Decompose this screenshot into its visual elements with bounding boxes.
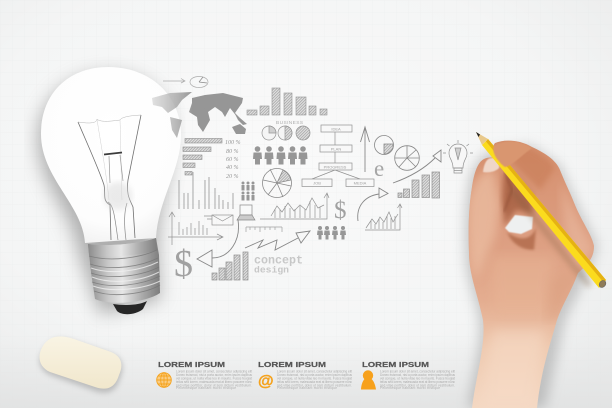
hand shading	[469, 140, 592, 376]
body text: sed vitae porttitor, dolor ut sem dictum vestibulum.	[380, 384, 455, 388]
icon: at sign: @	[258, 373, 274, 390]
concept design caption: design	[254, 264, 289, 276]
body text	[176, 370, 252, 390]
glass stem	[104, 182, 132, 210]
letter e: e	[374, 156, 384, 181]
info block: globe	[157, 362, 252, 390]
body text: Donec euismod, nisl a porta auctor, enim ipsum dapibus	[277, 373, 352, 377]
axis chart	[168, 212, 223, 245]
body text: Donec euismod, nisl a porta auctor, enim ipsum dapibus	[176, 373, 252, 377]
glass envelope	[41, 67, 181, 243]
gap between fingers	[505, 215, 533, 234]
body text: sed vitae porttitor, dolor ut sem dictum vestibulum.	[277, 384, 352, 388]
dollar sign left: $	[174, 243, 193, 285]
pencil	[476, 132, 607, 289]
percentages: 100 %	[225, 140, 240, 146]
pencil end	[598, 279, 607, 289]
body text: tellus sed lorem, malesuada erat at libero posuere nunc	[380, 380, 455, 384]
pencil point	[476, 132, 488, 145]
large pie chart	[262, 168, 292, 198]
body text: vel congue, ut nulla vitae leo in mauris. Fusce feugiat	[277, 376, 352, 380]
heading: LOREM IPSUM	[158, 362, 225, 369]
percentages: 60 %	[226, 157, 238, 163]
zigzag arrow	[245, 231, 310, 250]
body text: tellus sed lorem, malesuada erat at libero posuere nunc	[277, 380, 352, 384]
heading: LOREM IPSUM	[258, 362, 326, 369]
icon: person	[361, 370, 376, 390]
up arrow	[360, 127, 370, 172]
flowchart	[302, 125, 374, 186]
filament assembly	[78, 115, 141, 240]
light bulb	[38, 67, 181, 314]
body text: sed vitae porttitor, dolor ut sem dictum vestibulum.	[176, 384, 252, 388]
body text: Donec euismod, nisl a porta auctor, enim ipsum dapibus	[380, 373, 455, 377]
body text: Lorem ipsum dolor sit amet, consectetur adipiscing elit	[176, 370, 252, 374]
body text: Pellentesque habitant morbi tristique	[176, 386, 236, 390]
pencil shadow	[512, 190, 590, 286]
body text	[380, 370, 455, 390]
coin stacks	[212, 252, 248, 280]
people group bottom	[317, 226, 346, 240]
body text: Pellentesque habitant morbi tristique	[277, 386, 337, 390]
horizontal progress bars	[183, 138, 222, 175]
screw base	[88, 238, 160, 314]
pie with hatched slice	[374, 136, 394, 154]
percentages: 20 %	[226, 174, 238, 180]
info block: person	[361, 362, 455, 390]
body text	[277, 370, 352, 390]
body text: vel congue, ut nulla vitae leo in mauris. Fusce feugiat	[380, 376, 455, 380]
ruler	[246, 227, 282, 232]
light bulb idea icon	[443, 140, 473, 173]
pencil body	[482, 139, 606, 288]
laptop	[237, 205, 255, 220]
small area chart	[365, 204, 402, 230]
index fingertip over pencil	[493, 141, 532, 167]
rising bars	[398, 172, 440, 198]
body text: tellus sed lorem, malesuada erat at libero posuere nunc	[176, 380, 252, 384]
segmented wheel	[395, 146, 419, 170]
hand holding pencil	[465, 141, 598, 408]
flowchart: MEDIA	[354, 180, 367, 186]
info block: at sign	[258, 362, 352, 390]
hand shadow	[465, 145, 598, 408]
envelope	[204, 215, 233, 225]
thumbnail	[483, 158, 499, 172]
three round charts	[262, 126, 310, 140]
body text: Lorem ipsum dolor sit amet, consectetur adipiscing elit	[380, 370, 455, 374]
concept design caption	[254, 254, 303, 276]
dollar sign right: $	[334, 197, 346, 224]
heading: LOREM IPSUM	[362, 362, 429, 369]
percentages: 80 %	[226, 149, 238, 155]
sketch drawings	[152, 76, 473, 285]
bulb shadow	[38, 74, 172, 314]
body text: Lorem ipsum dolor sit amet, consectetur adipiscing elit	[277, 370, 352, 374]
percentages	[225, 140, 240, 180]
eraser	[40, 336, 122, 393]
area chart	[260, 193, 329, 219]
row of people	[253, 146, 308, 164]
flowchart: PROGRESS	[324, 164, 347, 170]
business heading: BUSINESS	[276, 120, 303, 126]
curved arrow right	[358, 188, 388, 221]
world map	[152, 92, 247, 138]
curved arrow to dollar	[197, 220, 238, 267]
body text: vel congue, ut nulla vitae leo in mauris. Fusce feugiat	[176, 376, 252, 380]
growth arrow	[393, 150, 441, 183]
small arrow and pie	[163, 76, 208, 88]
flowchart: PLAN	[331, 146, 341, 152]
small people grid	[242, 182, 254, 200]
hatched bar chart	[247, 88, 327, 115]
flowchart: IDEA	[331, 126, 341, 132]
percentages: 40 %	[226, 164, 238, 171]
flowchart: JOB	[313, 180, 321, 186]
body text: Pellentesque habitant morbi tristique	[380, 386, 440, 390]
concept design caption: concept	[254, 254, 303, 268]
hand silhouette	[469, 141, 594, 408]
contact tip	[113, 301, 147, 314]
icon: globe	[157, 373, 171, 387]
vertical line chart	[179, 172, 233, 209]
